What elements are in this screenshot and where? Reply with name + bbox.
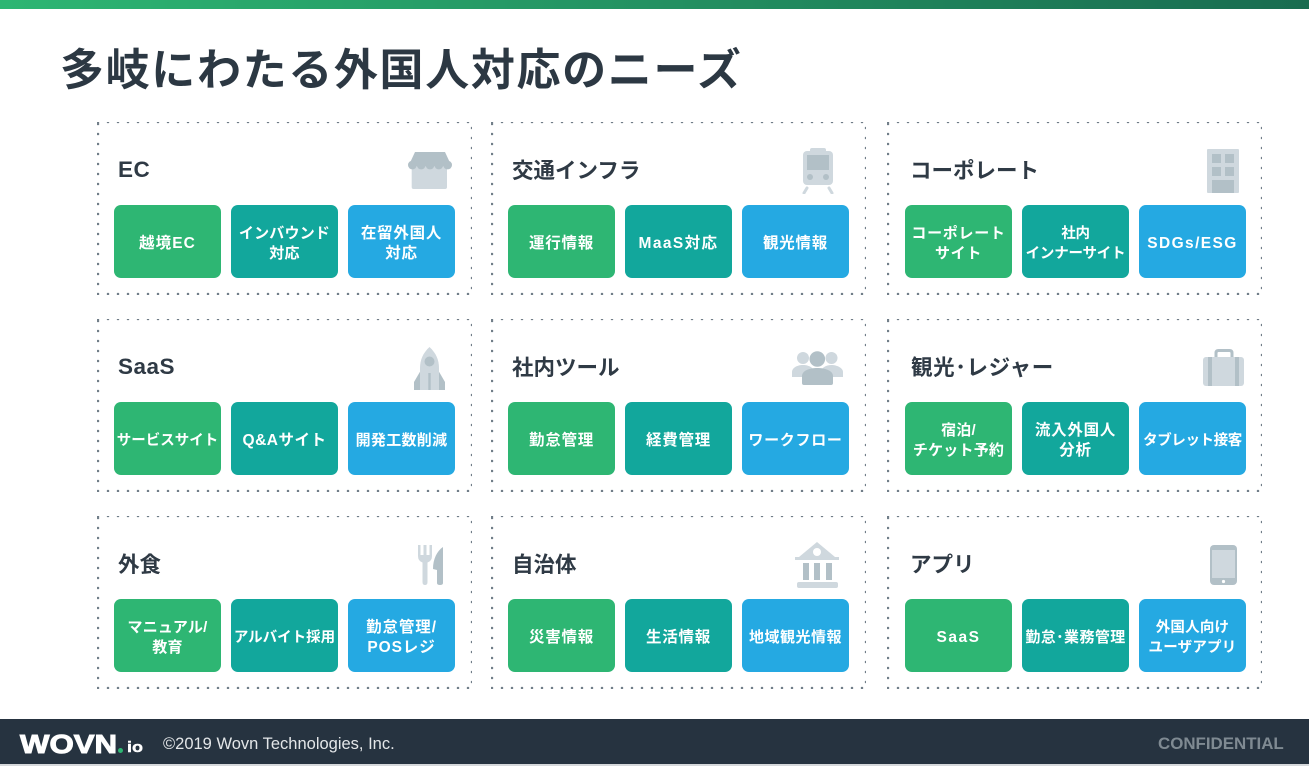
tile — [114, 402, 221, 475]
heading: EC — [118, 157, 150, 182]
tile: 外国人向け — [1156, 620, 1229, 636]
icon: suitcase — [1203, 349, 1244, 386]
icon: train — [802, 148, 834, 194]
tile — [348, 205, 455, 278]
panel: コーポレート — [887, 122, 1262, 295]
tile — [625, 205, 732, 278]
tile — [905, 599, 1012, 672]
tile: 教育 — [152, 638, 183, 656]
tile — [231, 599, 338, 672]
panel: 外食 — [97, 516, 472, 689]
tile — [1022, 402, 1129, 475]
footer bar — [0, 719, 1309, 766]
icon: people — [792, 351, 843, 385]
tile: 観光情報 — [763, 234, 828, 252]
tile: インバウンド — [239, 224, 330, 242]
panel: EC — [97, 122, 472, 295]
tile — [1022, 599, 1129, 672]
tile: サービスサイト — [117, 432, 218, 448]
heading: 社内ツール — [512, 356, 620, 380]
tile — [114, 205, 221, 278]
icon: office building — [1207, 149, 1239, 193]
tile — [742, 599, 849, 672]
tile: 越境EC — [139, 234, 196, 252]
tile — [114, 599, 221, 672]
tile: チケット予約 — [913, 442, 1004, 458]
tile: アルバイト採用 — [234, 630, 335, 646]
heading: 交通インフラ — [512, 159, 640, 183]
tile: 運行情報 — [529, 234, 594, 252]
tile: 社内 — [1061, 226, 1090, 242]
panel: 交通インフラ — [491, 122, 866, 295]
tile — [231, 205, 338, 278]
tile: 対応 — [269, 244, 300, 262]
tile: サイト — [935, 244, 982, 262]
heading: SaaS — [118, 354, 175, 379]
heading: 自治体 — [512, 553, 577, 577]
logo: io — [127, 739, 143, 756]
heading: コーポレート — [910, 159, 1039, 183]
tile — [742, 205, 849, 278]
tile — [348, 402, 455, 475]
title: 多岐にわたる外国人対応のニーズ — [60, 46, 743, 94]
tile: 経費管理 — [646, 432, 711, 448]
tile: マニュアル/ — [128, 618, 207, 636]
tile — [1139, 205, 1246, 278]
tile: Q&Aサイト — [243, 432, 326, 448]
tile: 地域観光情報 — [749, 628, 842, 646]
tile — [508, 205, 615, 278]
tile: SDGs/ESG — [1147, 234, 1238, 252]
top accent bar — [0, 0, 1309, 8]
tile — [348, 599, 455, 672]
tile — [1022, 205, 1129, 278]
tile — [231, 402, 338, 475]
panel: 自治体 — [491, 516, 866, 689]
tile — [1139, 402, 1246, 475]
tile — [905, 402, 1012, 475]
tile — [905, 205, 1012, 278]
tile: インナーサイト — [1026, 246, 1125, 262]
tile: ユーザアプリ — [1149, 640, 1236, 656]
tile: 宿泊/ — [941, 422, 976, 438]
tile — [742, 402, 849, 475]
tile: POSレジ — [367, 638, 436, 656]
icon: public building — [795, 542, 839, 588]
icon: smartphone — [1210, 545, 1237, 585]
tile: 在留外国人 — [361, 224, 442, 242]
heading: 外食 — [118, 553, 161, 577]
tile: タブレット接客 — [1143, 432, 1242, 448]
heading: 観光･レジャー — [911, 356, 1054, 380]
panel: 観光・レジャー — [887, 319, 1262, 492]
tile: SaaS — [937, 628, 980, 646]
tile: 開発工数削減 — [356, 432, 447, 448]
tile: 流入外国人 — [1035, 422, 1116, 438]
tile: 対応 — [385, 244, 418, 262]
tile: MaaS対応 — [639, 234, 718, 252]
tile: 災害情報 — [529, 628, 594, 646]
icon: storefront — [408, 152, 452, 189]
tile: 勤怠･業務管理 — [1025, 628, 1126, 646]
tile — [625, 599, 732, 672]
copyright: ©2019 Wovn Technologies, Inc. — [163, 735, 395, 753]
tile: 分析 — [1059, 442, 1092, 458]
panel: 社内ツール — [491, 319, 866, 492]
tile: ワークフロー — [748, 432, 843, 448]
panel: SaaS — [97, 319, 472, 492]
tile: 勤怠管理 — [529, 432, 594, 448]
tile — [508, 402, 615, 475]
logo: WOVN — [20, 729, 117, 759]
icon: fork and knife — [418, 545, 443, 585]
tile — [508, 599, 615, 672]
tile: コーポレート — [911, 224, 1006, 242]
tile — [1139, 599, 1246, 672]
tile: 勤怠管理/ — [366, 618, 437, 636]
icon: rocket — [414, 347, 445, 390]
tile — [625, 402, 732, 475]
confidential label: CONFIDENTIAL — [1158, 734, 1284, 753]
heading: アプリ — [910, 553, 975, 577]
panel: アプリ — [887, 516, 1262, 689]
tile: 生活情報 — [646, 628, 711, 646]
